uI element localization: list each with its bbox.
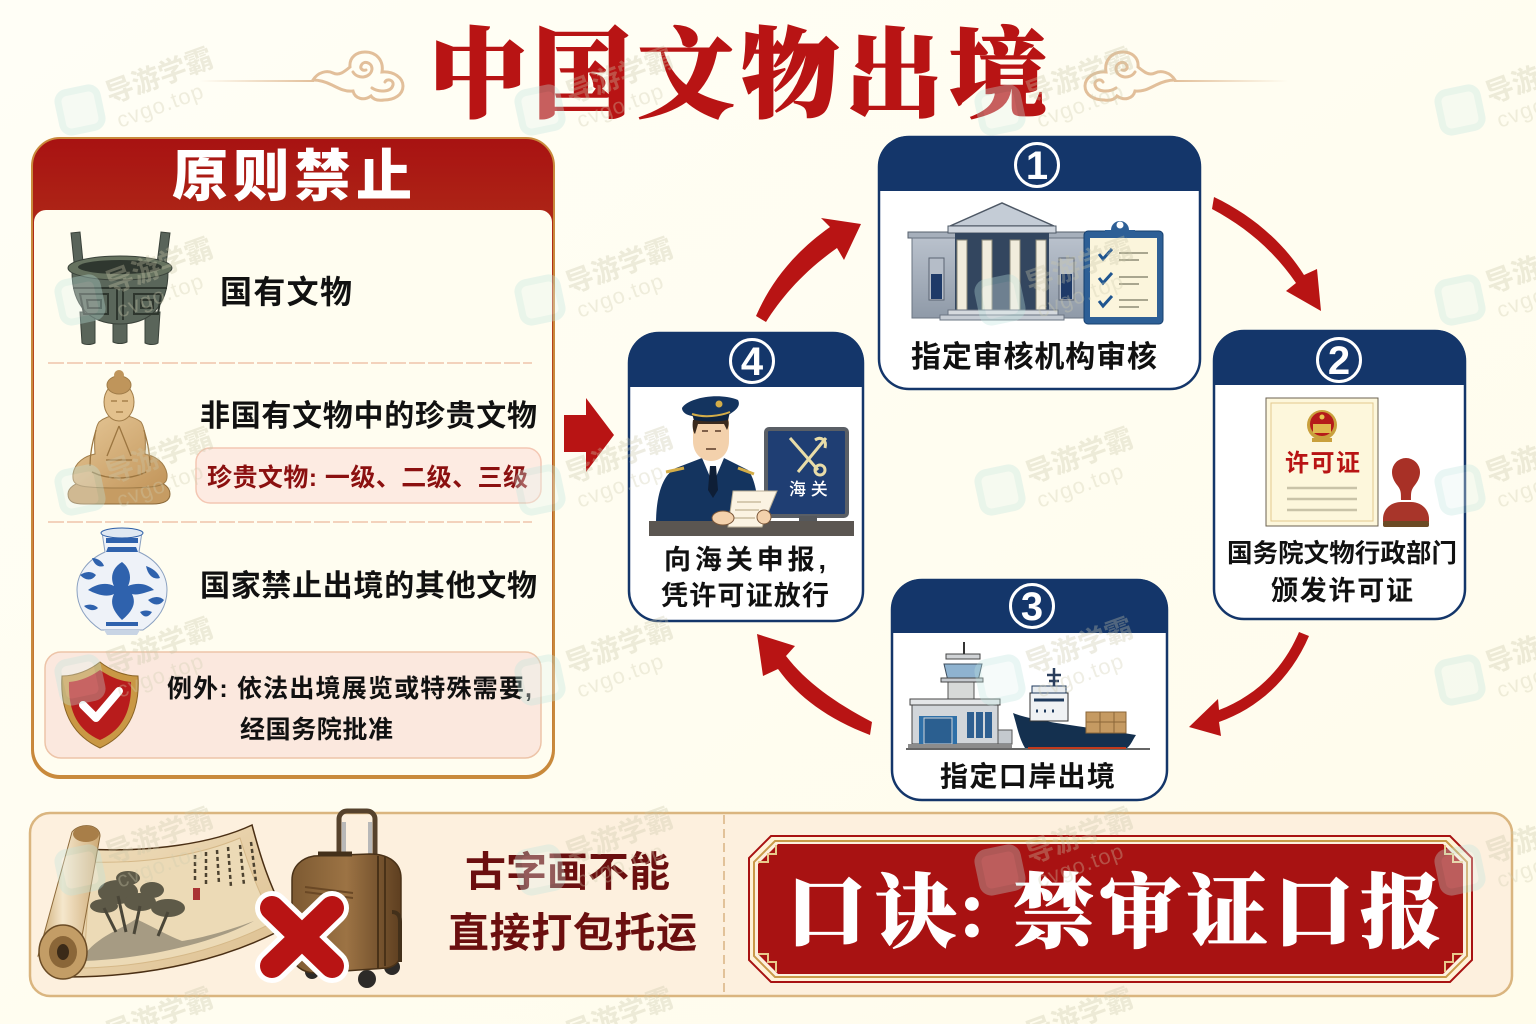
- title: 中国文物出境: [429, 0, 1047, 138]
- arrow: panel to flow: [564, 398, 614, 472]
- watermark pattern: 导游学霸: [561, 612, 677, 680]
- icon: suitcase: [292, 811, 401, 988]
- watermark pattern: 导游学霸: [101, 42, 217, 110]
- watermark pattern: cvgo.top: [1033, 268, 1127, 323]
- text: colon: :: [960, 856, 984, 957]
- text: 非国有文物中的珍贵文物: 非国有文物中的珍贵文物: [200, 400, 537, 433]
- watermark pattern: 导游学霸: [561, 422, 677, 490]
- text: 凭许可证放行: 凭许可证放行: [661, 581, 829, 611]
- text: exception line 2: 经国务院批准: [240, 716, 393, 744]
- watermark pattern: cvgo.top: [113, 78, 207, 133]
- arrow: step 3 to step 4: [757, 634, 872, 735]
- card 4: customs: 4: [741, 340, 764, 384]
- text: 向海关申报,: 向海关申报,: [664, 545, 826, 575]
- icon: red cross: [272, 908, 332, 966]
- icon: control tower and ship: [906, 642, 1150, 749]
- text: 颁发许可证: 颁发许可证: [1271, 576, 1413, 606]
- watermark pattern: 导游学霸: [1021, 42, 1137, 110]
- icon: seated buddha: [68, 370, 170, 504]
- icon: permit document: 许可证: [1285, 450, 1360, 477]
- text: 指定审核机构审核: 指定审核机构审核: [911, 341, 1157, 374]
- watermark pattern: 导游学霸: [561, 232, 677, 300]
- watermark pattern: 导游学霸: [101, 802, 217, 870]
- watermark pattern: 导游学霸: [1021, 422, 1137, 490]
- icon: museum and clipboard: [908, 203, 1163, 324]
- ornament: left cloud: [200, 52, 403, 100]
- icon: permit document: [1266, 398, 1378, 526]
- watermark pattern: 导游学霸: [101, 422, 217, 490]
- callout: exception: [45, 652, 541, 758]
- watermark pattern: cvgo.top: [1033, 78, 1127, 133]
- watermark pattern: cvgo.top: [113, 838, 207, 893]
- text: 直接打包托运: 直接打包托运: [448, 910, 697, 956]
- text: 口诀: 口诀: [786, 849, 956, 965]
- watermark pattern: cvgo.top: [113, 268, 207, 323]
- watermark pattern: 导游学霸: [1021, 232, 1137, 300]
- arrow: step 4 to step 1: [756, 218, 861, 322]
- watermark pattern: 导游学霸: [1021, 802, 1137, 870]
- ornament: right cloud: [1085, 52, 1288, 100]
- text: 国家禁止出境的其他文物: 国家禁止出境的其他文物: [200, 570, 537, 603]
- watermark pattern: cvgo.top: [1033, 648, 1127, 703]
- icon: rubber stamp: [1383, 458, 1429, 527]
- watermark pattern: 导游学霸: [561, 42, 677, 110]
- arrow: step 1 to step 2: [1212, 197, 1321, 311]
- arrow: step 2 to step 3: [1189, 632, 1309, 736]
- text: 国务院文物行政部门: 国务院文物行政部门: [1227, 540, 1457, 568]
- card 1: review: [878, 136, 1201, 389]
- text: 古字画不能: 古字画不能: [465, 849, 670, 895]
- text: 指定口岸出境: 指定口岸出境: [940, 761, 1115, 792]
- icon: painting scroll: [38, 825, 290, 979]
- card 2: permit: [1213, 330, 1466, 619]
- watermark pattern: cvgo.top: [573, 458, 667, 513]
- watermark pattern: cvgo.top: [1033, 458, 1127, 513]
- watermark pattern: 导游学霸: [101, 612, 217, 680]
- icon: customs officer at desk: [649, 396, 854, 536]
- text: 禁审证口报: 禁审证口报: [1013, 849, 1441, 965]
- card 1: review: 1: [1026, 144, 1048, 188]
- callout: grades: [196, 448, 541, 503]
- watermark pattern: 导游学霸: [101, 232, 217, 300]
- watermark pattern: cvgo.top: [573, 268, 667, 323]
- panel: bottom tip: [30, 811, 1512, 996]
- badge: mnemonic: [749, 836, 1472, 982]
- icon: bronze ding: [68, 232, 172, 344]
- watermark pattern: cvgo.top: [573, 838, 667, 893]
- callout: grades: 珍贵文物: 一级、二级、三级: [207, 464, 528, 492]
- watermark pattern: cvgo.top: [1033, 838, 1127, 893]
- watermark pattern: 导游学霸: [1021, 612, 1137, 680]
- card 3: port: [891, 579, 1168, 800]
- text: exception line 1: 例外: 依法出境展览或特殊需要,: [167, 675, 532, 703]
- watermark pattern: 导游学霸: [561, 802, 677, 870]
- panel: principle prohibited: [32, 138, 554, 778]
- watermark pattern: cvgo.top: [573, 648, 667, 703]
- watermark pattern: cvgo.top: [573, 78, 667, 133]
- heading: 原则禁止: 原则禁止: [172, 145, 412, 208]
- watermark pattern: cvgo.top: [113, 648, 207, 703]
- text: 国有文物: 国有文物: [220, 274, 352, 310]
- icon: shield check: [62, 662, 138, 748]
- icon: blue and white vase: [77, 528, 167, 635]
- watermark pattern: cvgo.top: [113, 458, 207, 513]
- card 2: permit: 2: [1328, 339, 1350, 383]
- card 4: customs: [628, 332, 864, 621]
- icon: customs officer at desk: 海 关: [789, 480, 828, 499]
- card 3: port: 3: [1021, 585, 1043, 629]
